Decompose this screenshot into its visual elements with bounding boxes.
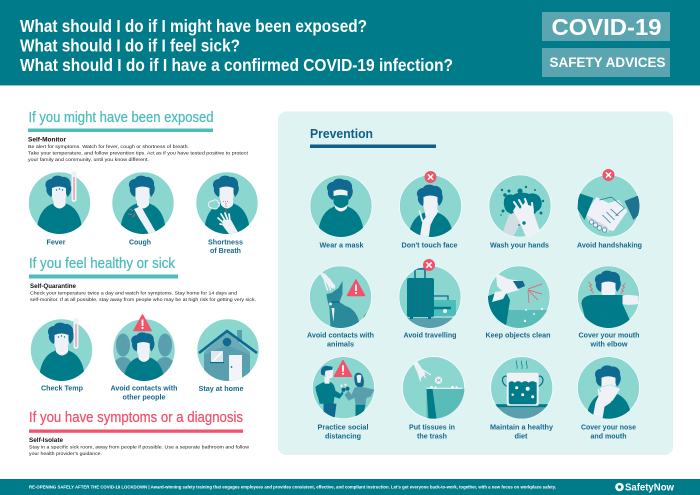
text block: self-monitor: Be alert for symptoms. Watch for fever, cough or shortness of breath.	[28, 144, 189, 149]
label: wash your hands: Wash your hands	[490, 240, 549, 249]
label: cough: Cough	[129, 238, 151, 246]
panel: prevention	[278, 112, 673, 455]
text block: social distancing label: distancing	[325, 432, 361, 440]
label: stay at home: Stay at home	[198, 384, 244, 393]
text block: self-quarantine: Check your temperature twice a day and watch for symptoms. Stay home for 14 days and	[30, 290, 238, 296]
text block: self-monitor: Take your temperature, and follow prevention tips. Act as if you have tested positive to protect	[28, 150, 249, 156]
text block: self-monitor: Self-Monitor	[28, 138, 67, 144]
icon: don't touch face	[400, 171, 462, 245]
icon: shortness of breath	[196, 172, 258, 236]
label: wear a mask: Wear a mask	[320, 240, 364, 249]
text block: elbow label: Cover your mouth	[578, 331, 640, 340]
text block: animals label: Avoid contacts with	[307, 331, 374, 340]
icon: stay at home	[197, 319, 259, 383]
badge: COVID-19: COVID-19	[552, 14, 662, 40]
text block: animals label	[307, 331, 374, 349]
label: avoid handshaking: Avoid handshaking	[577, 240, 642, 249]
badge: safety advices	[542, 48, 670, 77]
text block: self-isolate: your health provider's guidance.	[29, 451, 102, 456]
icon: check temp	[30, 318, 92, 383]
heading: exposed: If you might have been exposed	[28, 110, 214, 126]
icon: maintain a healthy diet	[491, 357, 553, 419]
section: if you might have been exposed	[28, 110, 258, 255]
icon: put tissues in the trash	[402, 357, 464, 419]
text block: diet label: Maintain a healthy	[490, 422, 554, 432]
icon: avoid travelling	[399, 259, 461, 328]
text block: shortness of breath label: of Breath	[210, 246, 241, 255]
label: check temp: Check Temp	[41, 384, 83, 392]
label: avoid travelling: Avoid travelling	[404, 331, 457, 340]
text block: diet label: diet	[514, 432, 528, 441]
text block: trash label: Put tissues in	[409, 422, 455, 432]
badge: safety advices: SAFETY ADVICES	[550, 54, 666, 70]
text block: elbow label	[578, 331, 640, 349]
text block: elbow label: with elbow	[590, 340, 628, 349]
section: if you feel healthy or sick	[29, 256, 259, 402]
text block: self-quarantine: self-monitor. If at all possible, stay away from people who may be at high risk for getting very sick.	[30, 297, 256, 302]
text block: self-isolate	[29, 438, 250, 456]
text block: avoid contacts label	[110, 384, 178, 402]
icon: keep objects clean	[488, 266, 550, 328]
text block: nose and mouth label: and mouth	[590, 432, 627, 440]
text block: self-monitor: your family and community, until you know different.	[28, 157, 149, 162]
header questions	[20, 16, 453, 75]
icon: fever	[28, 171, 90, 236]
text block: avoid contacts label: other people	[122, 392, 166, 402]
text block: nose and mouth label	[581, 422, 636, 440]
text block: diet label	[490, 422, 554, 441]
heading: healthy or sick: If you feel healthy or sick	[29, 256, 176, 272]
section: if you have symptoms or a diagnosis	[29, 409, 250, 456]
label: don't touch face: Don't touch face	[402, 240, 458, 249]
text block: trash label: the trash	[417, 432, 447, 440]
heading: prevention: Prevention	[310, 126, 373, 141]
footer bar	[0, 479, 700, 495]
label: keep objects clean: Keep objects clean	[486, 331, 551, 340]
text block: self-quarantine: Self-Quarantine	[30, 284, 77, 290]
text block: nose and mouth label: Cover your nose	[581, 422, 636, 432]
text block: animals label: animals	[327, 340, 354, 349]
icon: practice social distancing	[312, 357, 374, 419]
text block: self-isolate: Self-Isolate	[29, 438, 64, 444]
icon: wear a mask	[310, 175, 372, 239]
logo: SafetyNow: SafetyNow	[625, 482, 674, 494]
heading: symptoms or diagnosis: If you have symptoms or a diagnosis	[29, 409, 243, 426]
text block: self-quarantine	[30, 284, 256, 302]
text block: trash label	[409, 422, 455, 440]
text block: self-monitor	[28, 138, 249, 162]
header banner	[0, 0, 700, 86]
footer text: RE-OPENING SAFELY AFTER THE COVID-19 LOCKDOWN | Award-winning safety training that engages employees and provides consistent, effective, and compliant instruction. Let's get everyone back-to-work, together, with a new focus on workplace safety.	[29, 485, 556, 490]
text block: social distancing label: Practice social	[318, 422, 368, 432]
icon: avoid contacts with animals	[310, 266, 372, 328]
icon: cover your nose and mouth	[578, 357, 640, 426]
text block: self-isolate: Stay in a specific sick room, away from people if possible. Use a seperate bathroom and follow	[29, 444, 250, 450]
icon: avoid handshaking	[578, 169, 640, 237]
header questions: What should I do if I might have been exposed?	[20, 16, 367, 36]
text block: avoid contacts label: Avoid contacts with	[110, 384, 178, 392]
text block: shortness of breath label	[208, 238, 243, 255]
text block: social distancing label	[318, 422, 368, 440]
header questions: What should I do if I have a confirmed COVID-19 infection?	[20, 55, 453, 75]
icon: cover your mouth with elbow	[578, 266, 640, 328]
icon: cough	[112, 172, 174, 236]
icon: wash your hands	[489, 175, 551, 237]
text block: shortness of breath label: Shortness	[208, 238, 243, 246]
header questions: What should I do if I feel sick?	[20, 36, 240, 56]
icon: avoid contacts with other people	[113, 314, 175, 381]
label: fever: Fever	[46, 238, 66, 246]
